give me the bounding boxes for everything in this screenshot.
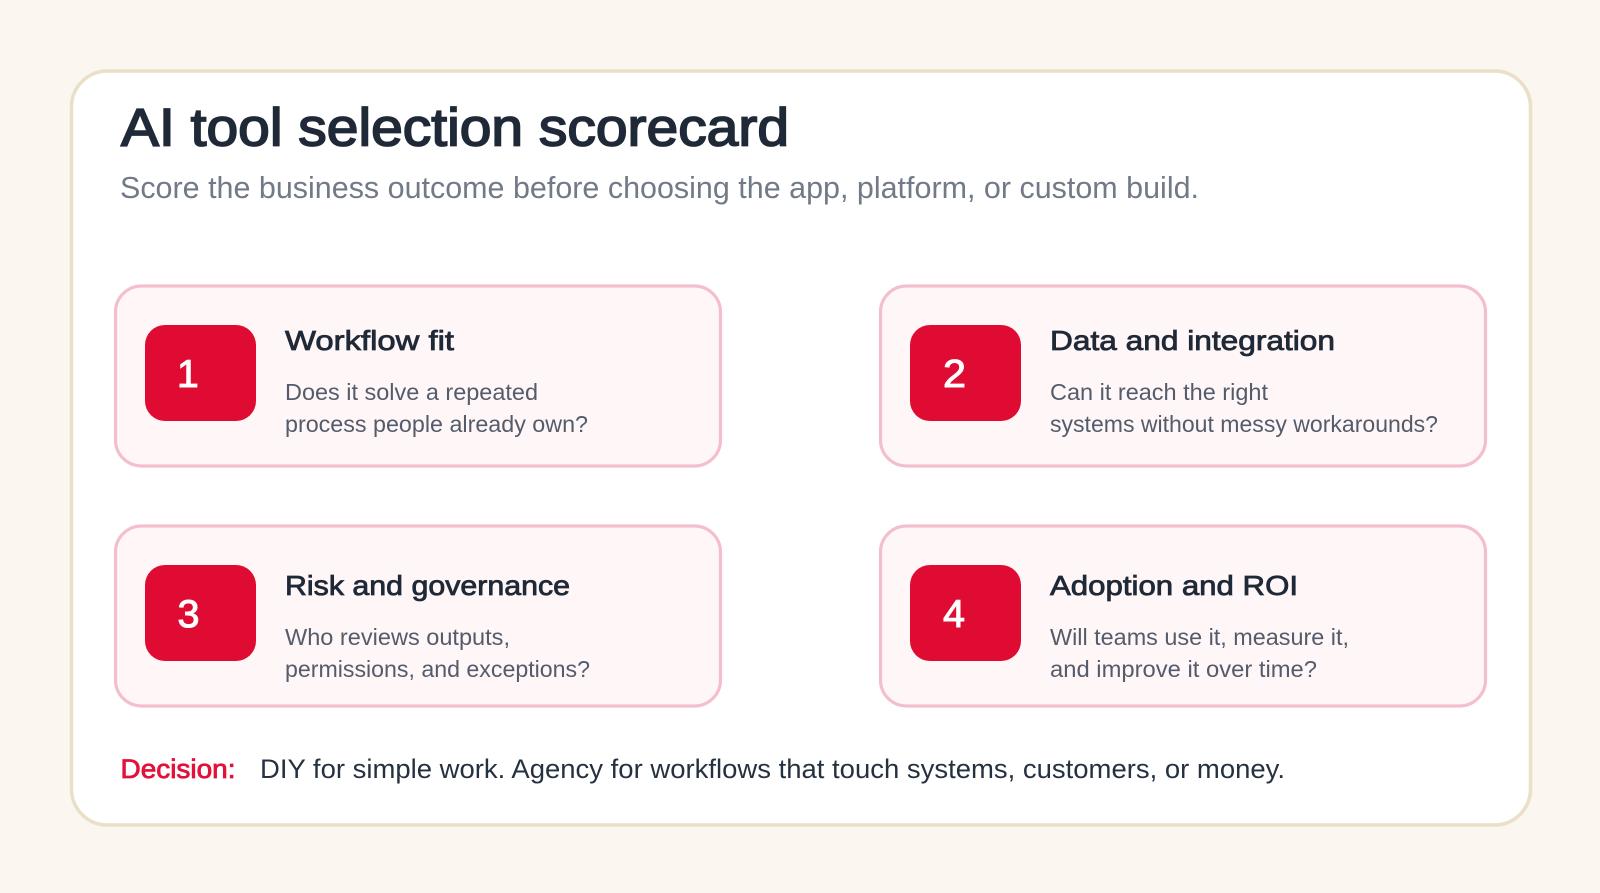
icon: number 1 xyxy=(145,325,256,421)
icon: number 3 xyxy=(145,565,256,661)
text: adoption and ROI question: Will teams use it, measure it, xyxy=(1050,624,1349,650)
heading: adoption and ROI: Adoption and ROI xyxy=(1050,570,1298,601)
title: AI tool selection scorecard xyxy=(121,98,789,158)
text: risk and governance question: Who reviews outputs, xyxy=(285,624,510,650)
icon: number 3: 3 xyxy=(178,593,200,636)
subtitle: Score the business outcome before choosing the app, platform, or custom build. xyxy=(120,170,1199,205)
text: workflow fit question: process people already own? xyxy=(285,411,588,437)
text: workflow fit question: Does it solve a repeated xyxy=(285,379,538,405)
text: risk and governance question: permissions, and exceptions? xyxy=(285,656,590,682)
heading: workflow fit: Workflow fit xyxy=(285,325,454,356)
icon: number 1: 1 xyxy=(177,353,199,396)
callout: decision: DIY for simple work. Agency for workflows that touch systems, customers, or money. xyxy=(260,754,1285,784)
text: workflow fit question xyxy=(285,379,588,437)
icon: number 2: 2 xyxy=(943,353,966,396)
icon: number 2 xyxy=(910,325,1021,421)
heading: data and integration: Data and integration xyxy=(1050,325,1335,356)
panel: data and integration xyxy=(880,286,1486,466)
text: data and integration question: Can it reach the right xyxy=(1050,379,1268,405)
callout: decision: Decision: xyxy=(120,754,236,784)
text: adoption and ROI question: and improve it over time? xyxy=(1050,656,1317,682)
text: risk and governance question xyxy=(285,624,590,682)
text: data and integration question xyxy=(1050,379,1438,437)
panel: workflow fit xyxy=(116,286,720,466)
text: data and integration question: systems without messy workarounds? xyxy=(1050,411,1438,437)
panel: adoption and ROI xyxy=(880,526,1486,706)
icon: number 4: 4 xyxy=(943,593,965,636)
panel: scorecard xyxy=(72,71,1530,825)
icon: number 4 xyxy=(910,565,1021,661)
panel: risk and governance xyxy=(116,526,720,706)
heading: risk and governance: Risk and governance xyxy=(285,570,570,601)
text: adoption and ROI question xyxy=(1050,624,1349,682)
